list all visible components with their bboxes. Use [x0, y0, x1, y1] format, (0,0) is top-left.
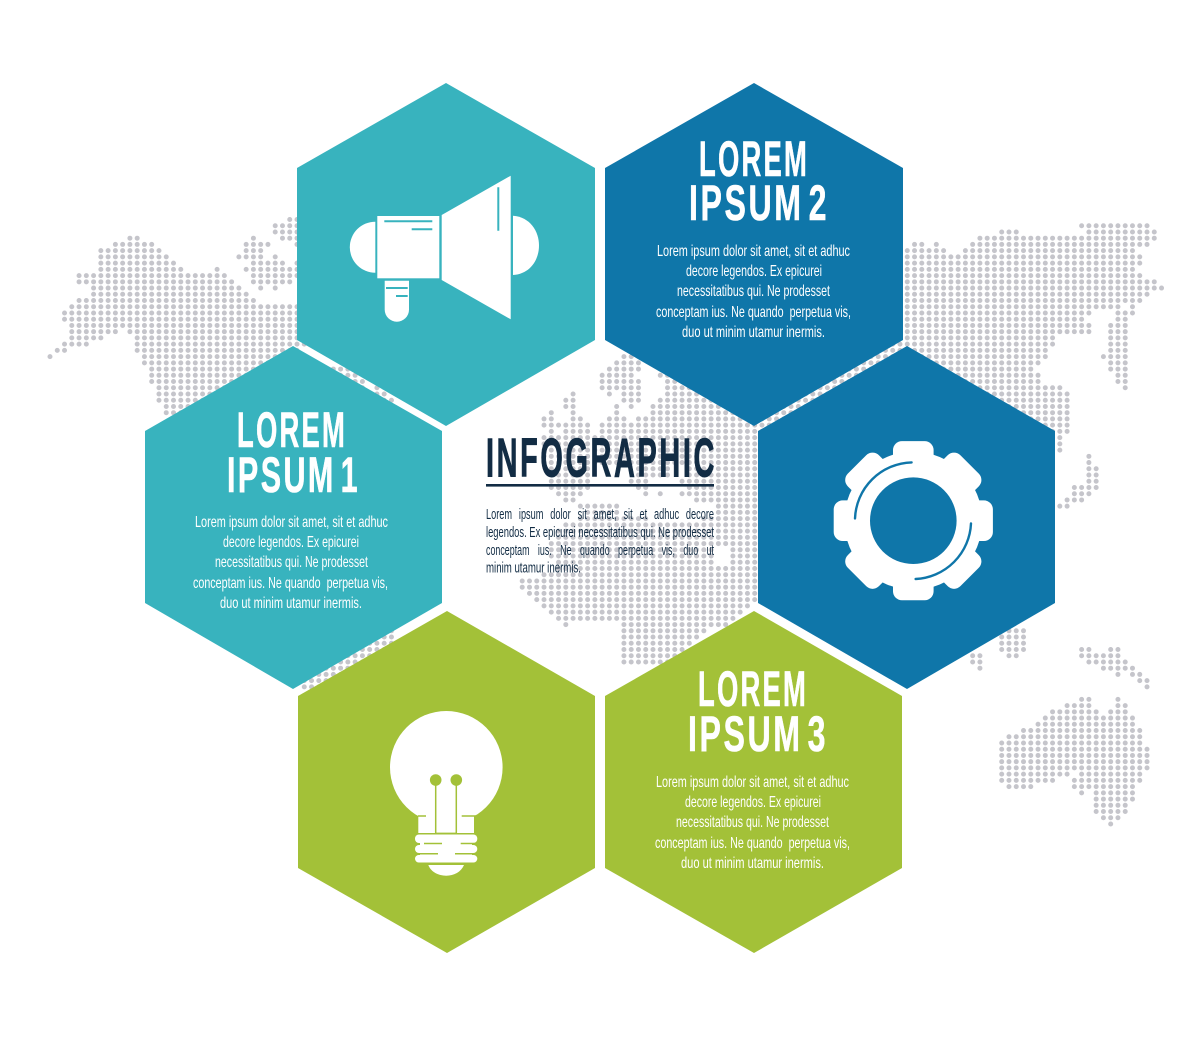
icon: gear	[834, 441, 993, 600]
text block: lorem ipsum 1 body: decore legendos. Ex epicurei	[223, 534, 359, 551]
panel: light bulb hexagon	[298, 611, 595, 953]
text block: lorem ipsum 2 body: decore legendos. Ex epicurei	[686, 263, 822, 280]
text block: lorem ipsum 1 body: duo ut minim utamur inermis.	[220, 595, 362, 612]
text block: lorem ipsum 1 body	[193, 514, 388, 612]
text block: central description	[486, 506, 715, 576]
text block: lorem ipsum 3 body: decore legendos. Ex epicurei	[685, 794, 821, 811]
text block: lorem ipsum 1 body: conceptam ius. Ne quando perpetua vis,	[193, 575, 388, 592]
text block: lorem ipsum 3 body	[655, 774, 850, 872]
text block: lorem ipsum 2 body	[656, 243, 851, 341]
dotted world map	[50, 220, 1170, 824]
heading: lorem ipsum 3: LOREM	[698, 661, 808, 717]
text block: central description: minim utamur inermis.	[486, 560, 581, 576]
heading: lorem ipsum 2: IPSUM 2	[689, 175, 829, 231]
heading: lorem ipsum 3: IPSUM 3	[688, 706, 828, 762]
text block: lorem ipsum 1 body: Lorem ipsum dolor sit amet, sit et adhuc	[195, 514, 388, 531]
text block: lorem ipsum 2 body: necessitatibus qui. Ne prodesset	[677, 283, 830, 300]
heading: lorem ipsum 3	[688, 661, 828, 762]
heading: lorem ipsum 1	[227, 402, 360, 503]
text block: central description: legendos. Ex epicurei necessitatibus qui. Ne prodesset	[486, 524, 715, 541]
icon: megaphone	[350, 176, 539, 322]
text block: central description: Lorem ipsum dolor sit amet, sit et adhuc decore	[486, 506, 714, 523]
panel: lorem ipsum 1 hexagon	[145, 346, 442, 689]
heading: lorem ipsum 2: LOREM	[699, 131, 809, 187]
title: INFOGRAPHIC	[486, 427, 717, 489]
panel: gear hexagon	[758, 346, 1055, 689]
text block: lorem ipsum 3 body: necessitatibus qui. Ne prodesset	[676, 814, 829, 831]
panel: lorem ipsum 2 hexagon	[605, 83, 903, 426]
text block: lorem ipsum 3 body: Lorem ipsum dolor sit amet, sit et adhuc	[656, 774, 849, 791]
heading: lorem ipsum 2	[689, 131, 829, 231]
text block: lorem ipsum 3 body: conceptam ius. Ne quando perpetua vis,	[655, 835, 850, 852]
text block: lorem ipsum 2 body: Lorem ipsum dolor sit amet, sit et adhuc	[657, 243, 850, 260]
panel: megaphone hexagon	[297, 83, 595, 426]
heading: lorem ipsum 1: IPSUM 1	[227, 447, 360, 503]
text block: lorem ipsum 1 body: necessitatibus qui. Ne prodesset	[215, 554, 368, 571]
heading: lorem ipsum 1: LOREM	[237, 402, 347, 458]
text block: lorem ipsum 2 body: duo ut minim utamur inermis.	[682, 324, 825, 341]
text block: lorem ipsum 2 body: conceptam ius. Ne quando perpetua vis,	[656, 304, 851, 321]
icon: light bulb	[390, 711, 503, 876]
text block: central description: conceptam ius. Ne quando perpetua vis, duo ut	[486, 542, 714, 559]
text block: lorem ipsum 3 body: duo ut minim utamur inermis.	[681, 855, 824, 872]
panel: lorem ipsum 3 hexagon	[605, 611, 902, 953]
